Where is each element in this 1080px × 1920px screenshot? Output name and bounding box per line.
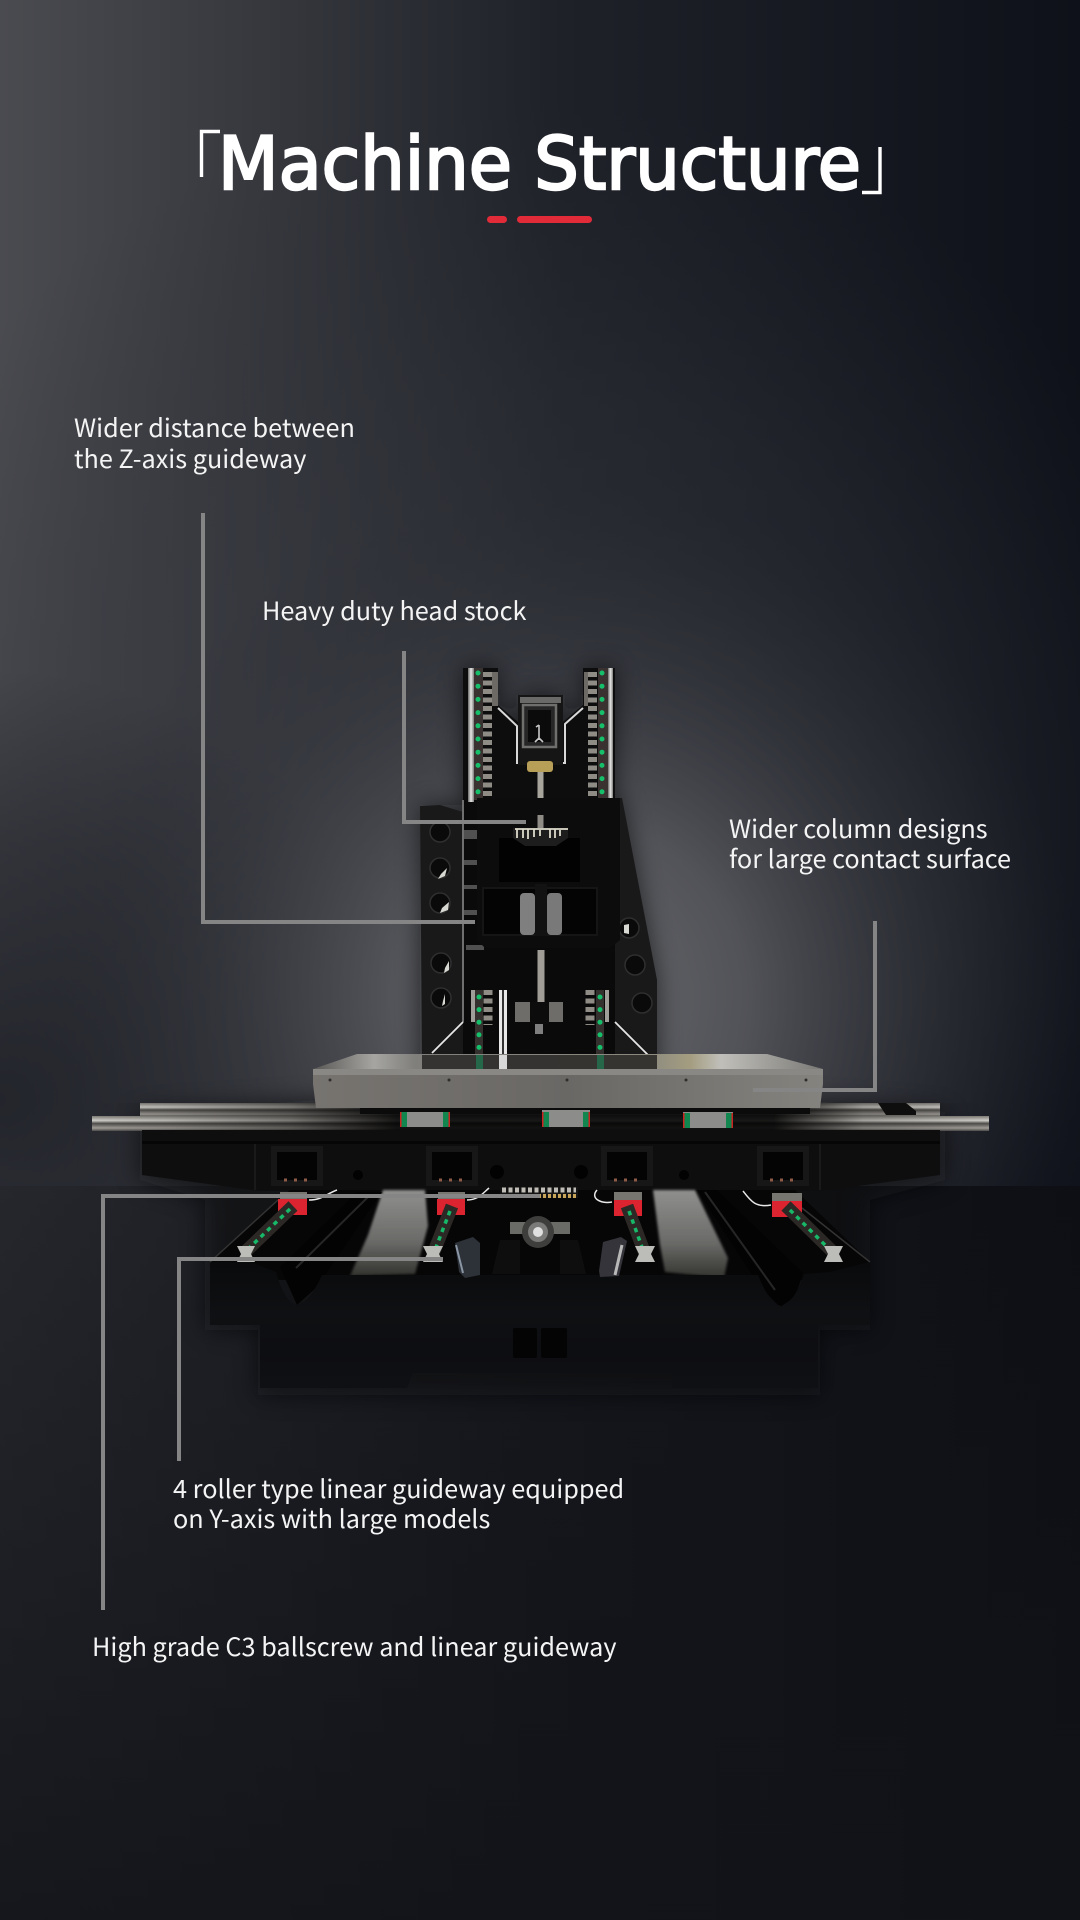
ball screw drive [492, 1187, 586, 1274]
bed interior [210, 1190, 870, 1280]
title left bracket [202, 132, 220, 177]
lower left rail [471, 990, 488, 1055]
table [313, 1054, 823, 1108]
bed front [210, 1262, 870, 1388]
bolt holes [430, 822, 652, 1013]
column backing [463, 668, 615, 800]
leader line: Z-axis guideway [203, 513, 475, 922]
column side legs [420, 798, 657, 1055]
table front face [313, 1069, 823, 1108]
v-shaped ribs [280, 1192, 382, 1305]
table top surface [313, 1054, 823, 1069]
machine [92, 668, 989, 1388]
right upper rail [584, 668, 613, 800]
hole highlights [438, 868, 629, 1006]
y-axis rail 2 [423, 1192, 465, 1262]
title text: Machine Structure [218, 122, 861, 207]
window pins [284, 1178, 312, 1182]
table underside shadow [360, 1108, 810, 1114]
label: column: for large contact surface [729, 840, 1011, 876]
leader line: head stock [404, 651, 526, 822]
leader line: C3 ballscrew [103, 1196, 540, 1610]
column edge strips [432, 708, 648, 1055]
label: roller guideway: on Y-axis with large models [173, 1500, 490, 1536]
y-axis rail 3 [614, 1192, 655, 1262]
column reflection [422, 1055, 657, 1069]
upper linear rails [92, 1103, 989, 1131]
label: head stock: Heavy duty head stock [262, 592, 526, 628]
leader line: column [753, 921, 875, 1090]
label: C3 ballscrew: High grade C3 ballscrew and linear guideway [92, 1628, 617, 1664]
saddle [142, 1130, 940, 1191]
machine shadow [140, 668, 945, 1395]
saddle holes [353, 1165, 689, 1180]
x-axis linear blocks [400, 1110, 733, 1128]
head stock block [477, 798, 620, 948]
cylinders [455, 1237, 627, 1278]
label: column: Wider column designs [729, 810, 988, 846]
left upper rail [468, 668, 498, 802]
bed [210, 1187, 870, 1388]
title [202, 122, 880, 207]
label: roller guideway: 4 roller type linear guideway equipped [173, 1470, 624, 1506]
top motor mount [518, 695, 563, 800]
leader line: roller guideway [179, 1259, 443, 1461]
title right bracket [862, 147, 880, 192]
label: Z-axis guideway: Wider distance between [74, 409, 355, 445]
rib highlights [296, 1192, 775, 1290]
y-axis rail 1 [237, 1192, 307, 1262]
saddle windows [274, 1149, 806, 1183]
lower right rail [590, 990, 609, 1055]
red accent bar [487, 216, 592, 223]
sensor wires [309, 1188, 771, 1206]
label: Z-axis guideway: the Z-axis guideway [74, 440, 306, 476]
y-axis rail 4 [772, 1193, 843, 1262]
mottled cast surfaces [350, 1190, 428, 1276]
vertical column [420, 668, 657, 1068]
lower ball screw and mount [499, 950, 563, 1068]
